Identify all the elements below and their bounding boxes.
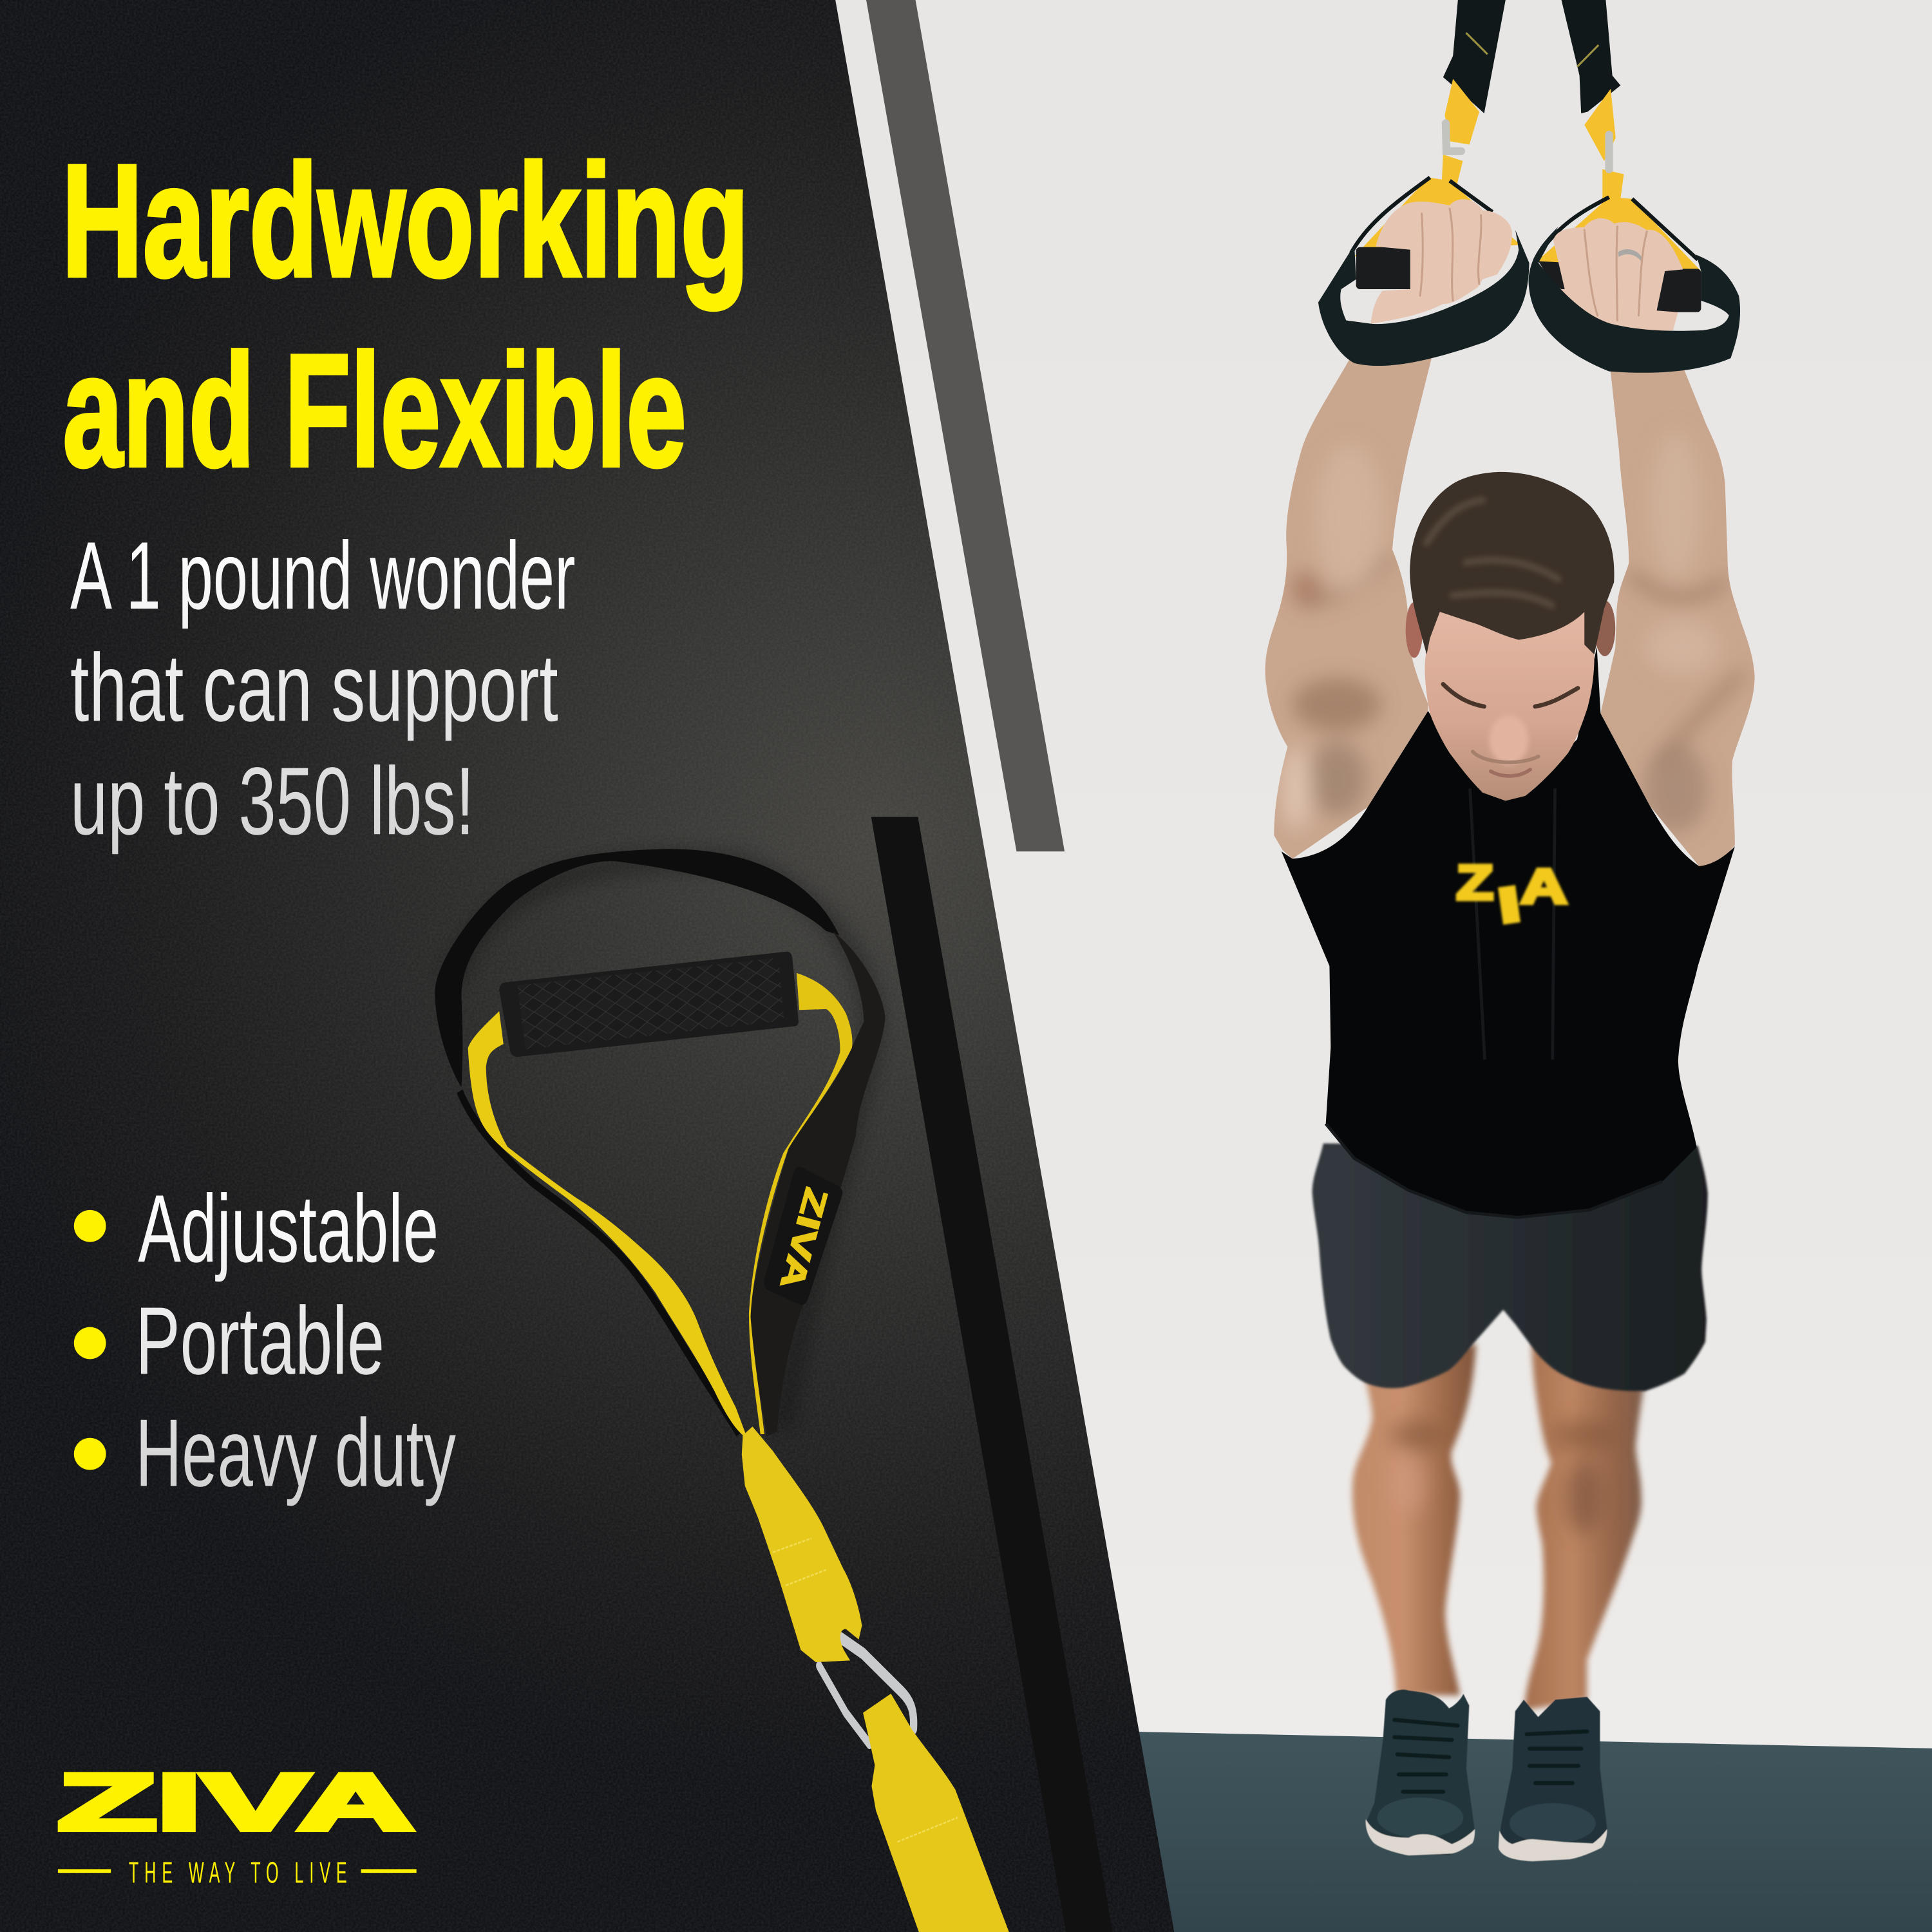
title: [62, 131, 749, 500]
bullet: heavy duty: Heavy duty: [135, 1399, 456, 1506]
strap top edges: [1351, 178, 1698, 260]
bullet: adjustable: Adjustable: [138, 1175, 439, 1282]
laces: [1394, 1720, 1587, 1792]
right sole: [1499, 1829, 1607, 1861]
black loop top: [435, 849, 839, 1087]
badge logo text: ZIVA: [773, 1184, 835, 1293]
left hand: [1371, 199, 1512, 324]
wedding ring: [1618, 249, 1642, 261]
floor: [1109, 1731, 1932, 1932]
tank logo: [1456, 856, 1567, 934]
lower strap: [863, 1694, 1009, 1932]
grips: [1356, 247, 1428, 289]
shorts: [1312, 1144, 1708, 1391]
carabiners: [1446, 123, 1609, 169]
strap stitching: [1466, 33, 1598, 67]
title: Hardworking: [62, 131, 749, 310]
left black edge: [460, 1091, 739, 1434]
left shoe: [1366, 1690, 1475, 1855]
feature list: [74, 1175, 456, 1506]
front band, right: [1529, 227, 1740, 373]
left sole: [1366, 1819, 1475, 1855]
grey diagonal bar: [866, 0, 1065, 851]
carabiner: [819, 1638, 914, 1744]
bullet: adjustable: [74, 1175, 439, 1282]
dark left panel: [0, 0, 1174, 1932]
bullet: portable: [74, 1287, 384, 1394]
grip texture: [517, 958, 784, 1049]
black diagonal bar: [871, 817, 1113, 1932]
handle product photo: [435, 849, 1009, 1932]
hair: [1410, 472, 1615, 654]
trainer handles held overhead: [1318, 0, 1740, 373]
tank folds: [1326, 788, 1662, 1217]
hanging straps: [1443, 0, 1620, 113]
mouth and stubble: [1473, 752, 1539, 776]
title: and Flexible: [63, 321, 687, 500]
head drawn in crop coordinates: [1406, 472, 1615, 800]
grip: [499, 952, 799, 1057]
bullet: portable: Portable: [135, 1287, 384, 1394]
muscle shading: [1282, 431, 1743, 833]
yellow strap folds: [1354, 79, 1701, 271]
tank logo: A: [1520, 859, 1567, 914]
knee shading: [1390, 1421, 1615, 1534]
tank logo: I: [1495, 876, 1524, 934]
handle drawn in crop coordinates: [435, 849, 886, 1438]
subheading: [70, 522, 575, 855]
front band, left: [1318, 230, 1530, 366]
right shoe: [1499, 1697, 1607, 1861]
shoes: [1366, 1690, 1607, 1861]
subheading: up to 350 lbs!: [70, 747, 475, 855]
black webbing: [750, 931, 886, 1436]
subheading: that can support: [70, 634, 558, 741]
hair highlights: [1426, 500, 1558, 605]
lower hardware drawn in crop coordinates: [742, 1426, 1009, 1932]
wordmark: ZIVA: [58, 1757, 414, 1847]
toe lightening: [1378, 1797, 1596, 1844]
yellow webbing left: [468, 1011, 747, 1438]
brand logo: [58, 1757, 417, 1889]
right arm: [1600, 367, 1755, 867]
legs: [1352, 1343, 1643, 1710]
stitching: [773, 1539, 958, 1842]
handle shadow: [450, 860, 873, 1429]
yellow sleeve: [742, 1426, 862, 1662]
logo badge: [764, 1167, 842, 1305]
tagline: THE WAY TO LIVE: [129, 1855, 347, 1889]
finger lines: [1420, 209, 1647, 321]
nose: [1489, 715, 1529, 764]
eyebrows and eyes: [1443, 684, 1578, 706]
subheading: A 1 pound wonder: [70, 522, 575, 629]
bullet: heavy duty: [74, 1399, 456, 1506]
right hand: [1553, 218, 1683, 330]
tank top: [1282, 647, 1735, 1217]
left arm: [1265, 357, 1432, 859]
yellow webbing right: [749, 973, 853, 1434]
ears: [1406, 600, 1615, 658]
tank logo: Z: [1456, 856, 1493, 911]
photo: man with suspension trainer: [1265, 0, 1755, 1861]
face: [1425, 609, 1595, 800]
